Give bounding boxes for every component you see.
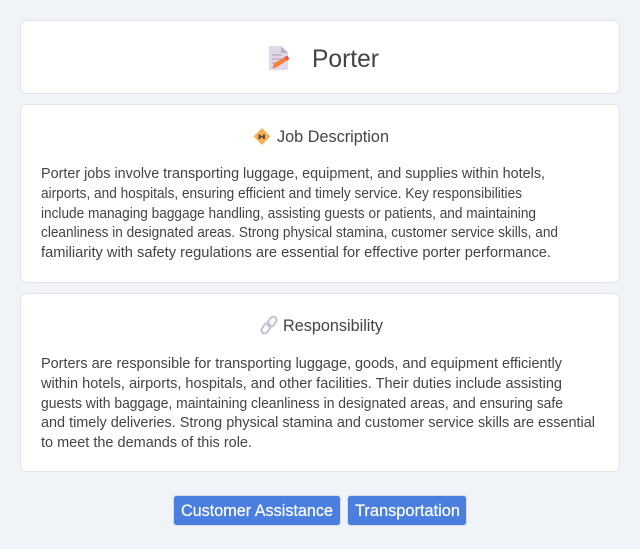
text block: job description: airports, and hospitals, ensuring efficient and timely service. Key responsibilities — [41, 186, 522, 202]
heading: Porter: Porter — [312, 45, 379, 73]
panel: job description — [20, 104, 620, 282]
text block: job description: cleanliness in designated areas. Strong physical stamina, customer service skills, and — [41, 225, 558, 241]
panel: title — [20, 20, 620, 94]
text block: responsibility: guests with baggage, maintaining cleanliness in designated areas, and ensuring safe — [41, 396, 563, 412]
tag: Customer Assistance: Customer Assistance — [181, 502, 333, 520]
heading: Job Description: Job Description — [277, 128, 389, 146]
text block: responsibility: and timely deliveries. Strong physical stamina and customer service skills are essential — [41, 415, 595, 431]
text block: job description: Porter jobs involve transporting luggage, equipment, and supplies within hotels, — [41, 166, 545, 182]
text block: responsibility: within hotels, airports, hospitals, and other facilities. Their duties include assisting — [40, 376, 562, 392]
text block: job description — [41, 166, 558, 261]
icon: document with pencil — [269, 46, 290, 70]
text block: job description: familiarity with safety regulations are essential for effective porter performance. — [41, 245, 551, 261]
text block: responsibility: Porters are responsible for transporting luggage, goods, and equipment efficiently — [41, 356, 563, 372]
tag: Transportation: Transportation — [355, 502, 460, 520]
heading: Responsibility: Responsibility — [283, 317, 384, 335]
tag: Customer Assistance — [174, 496, 340, 526]
icon: chain link — [260, 315, 278, 335]
tag: Transportation — [348, 496, 466, 526]
text block: job description: include managing baggage handling, assisting guests or patients, and maintaining — [41, 206, 536, 222]
panel: responsibility — [20, 294, 620, 472]
text block: responsibility: to meet the demands of this role. — [41, 435, 252, 451]
text block: responsibility — [40, 356, 595, 451]
icon: orange diamond sign — [254, 129, 270, 144]
